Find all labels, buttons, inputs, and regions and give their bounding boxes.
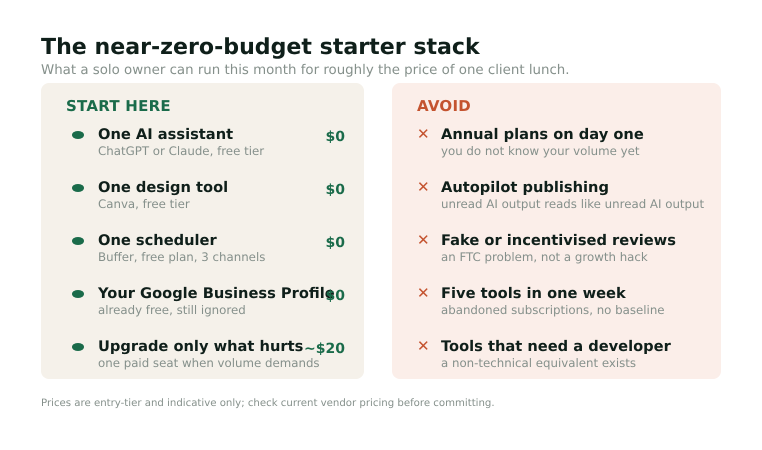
item name: One AI assistant [98,126,233,143]
item detail: one paid seat when volume demands [98,356,320,370]
item: fake reviews [417,231,676,264]
cross icon: ✕ [417,231,430,249]
title: The near-zero-budget starter stack [41,34,480,60]
heading: start here: START HERE [66,97,171,115]
item name: Five tools in one week [441,285,626,302]
price: ~$20 [304,341,345,357]
item: developer tools [417,337,671,370]
item detail: already free, still ignored [98,302,246,316]
item name: Autopilot publishing [441,179,609,196]
item: autopilot publishing [417,178,704,210]
item detail: a non-technical equivalent exists [441,356,636,370]
item name: One scheduler [98,232,217,249]
item: five tools [417,284,665,316]
cross icon: ✕ [417,178,430,196]
item detail: ChatGPT or Claude, free tier [98,144,264,158]
subtitle: What a solo owner can run this month for roughly the price of one client lunch. [41,63,570,78]
item detail: abandoned subscriptions, no baseline [441,302,665,316]
item: upgrade only what hurts [72,338,345,370]
panel: start here [41,83,364,379]
item: one scheduler [72,232,345,264]
cross icon: ✕ [417,337,430,355]
item name: Annual plans on day one [441,126,644,143]
price: $0 [326,235,345,251]
bullet [72,131,84,139]
item: one design tool [72,179,345,210]
panel: avoid [392,83,721,379]
price: $0 [326,129,345,145]
item detail: an FTC problem, not a growth hack [441,250,648,264]
item name: One design tool [98,179,228,196]
bullet [72,184,84,192]
item: google business profile [72,285,345,316]
heading: avoid: AVOID [417,97,471,115]
item detail: Buffer, free plan, 3 channels [98,250,265,264]
bullet [72,290,84,298]
bullet [72,343,84,351]
item name: Upgrade only what hurts [98,338,303,355]
bullet [72,237,84,245]
item: one AI assistant [72,126,345,158]
cross icon: ✕ [417,284,430,302]
item name: Fake or incentivised reviews [441,232,676,249]
item name: Tools that need a developer [441,338,671,355]
price: $0 [326,182,345,198]
price: $0 [326,288,345,304]
item detail: unread AI output reads like unread AI output [441,196,704,210]
footnote: Prices are entry-tier and indicative only; check current vendor pricing before committing. [41,398,495,408]
item: annual plans [417,125,644,158]
item detail: you do not know your volume yet [441,144,639,158]
item detail: Canva, free tier [98,196,190,210]
cross icon: ✕ [417,125,430,143]
item name: Your Google Business Profile [98,285,335,302]
